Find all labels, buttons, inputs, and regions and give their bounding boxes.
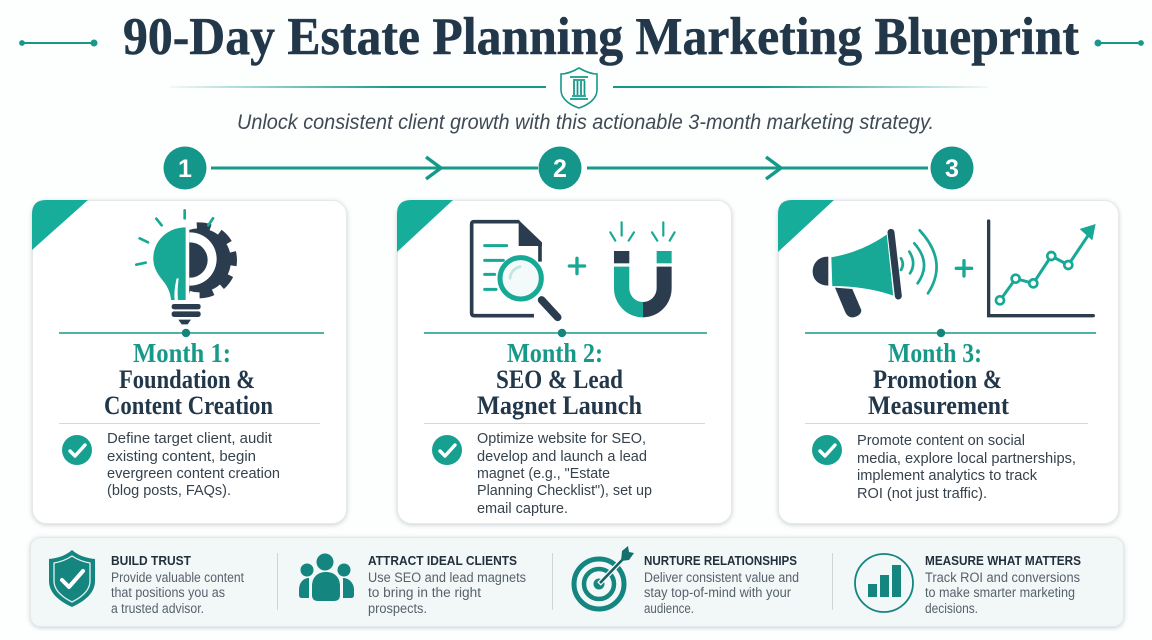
icon: check [812, 435, 842, 465]
text: build trust: that positions you as [111, 585, 225, 600]
text: measure what matters: Track ROI and conversions [925, 570, 1080, 585]
step 2 marker: 2 [553, 155, 567, 183]
benefit: nurture relationships [574, 546, 799, 616]
month 3 description: ROI (not just traffic). [857, 486, 987, 502]
text: attract ideal clients: ATTRACT IDEAL CLIENTS [368, 553, 517, 568]
icon: shield check [49, 550, 95, 607]
heading: month 3: Measurement [868, 391, 1009, 420]
month 3 description: Promote content on social [857, 433, 1025, 449]
step 2 marker [538, 146, 582, 190]
benefit: measure what matters [855, 553, 1081, 616]
text: nurture relationships: Deliver consistent value and [644, 570, 799, 585]
card background [778, 200, 1118, 524]
text: measure what matters: to make smarter marketing [925, 585, 1075, 600]
icon: check [432, 435, 462, 465]
icon: shield with pillar [561, 68, 597, 108]
month 2 description: Planning Checklist"), set up [477, 483, 652, 499]
heading: month 1 [104, 338, 273, 420]
month 2 description: Optimize website for SEO, [477, 431, 646, 447]
text: attract ideal clients [368, 553, 526, 616]
text: nurture relationships: stay top-of-mind with your [644, 585, 791, 600]
decoration: left title line [20, 40, 97, 46]
heading: month 1: Foundation & [119, 365, 255, 394]
divider with dot [805, 329, 1096, 337]
title: 90-Day Estate Planning Marketing Blueprint [123, 8, 1079, 66]
decoration: right header rule [613, 86, 988, 88]
month 1 description [107, 431, 280, 499]
heading: month 3 [868, 338, 1009, 420]
text: build trust: BUILD TRUST [111, 553, 191, 568]
step 1 marker: 1 [178, 155, 192, 183]
icon: people [299, 554, 354, 601]
month 3 description: media, explore local partnerships, [857, 451, 1076, 467]
icon: bar chart in circle [855, 554, 913, 612]
month 2 description [477, 431, 652, 517]
text: attract ideal clients: to bring in the right [368, 585, 481, 600]
benefit: attract ideal clients [299, 553, 526, 616]
heading: month 2 [477, 338, 642, 420]
icon: document, magnifier, plus and magnet [472, 220, 675, 317]
heading: month 3: Promotion & [873, 365, 1002, 394]
divider with dot [59, 329, 324, 337]
strip background [30, 538, 1124, 626]
heading: month 1: Month 1: [133, 338, 231, 368]
month 2 description: develop and launch a lead [477, 449, 647, 465]
step 3 marker [930, 146, 974, 190]
text: nurture relationships: audience. [644, 601, 694, 616]
card background [398, 200, 732, 524]
month 1 description: evergreen content creation [107, 466, 280, 482]
step timeline [164, 146, 974, 190]
text: nurture relationships: NURTURE RELATIONSHIPS [644, 553, 797, 568]
text: attract ideal clients: prospects. [368, 601, 427, 616]
text: nurture relationships [644, 553, 799, 616]
month 1 description: (blog posts, FAQs). [107, 483, 231, 499]
benefit: build trust [49, 550, 244, 616]
month 3 description: implement analytics to track [857, 468, 1038, 484]
heading: month 3: Month 3: [888, 338, 982, 368]
text: build trust: Provide valuable content [111, 570, 244, 585]
icon: light bulb and gear [136, 210, 239, 324]
divider with dot [424, 329, 707, 337]
subtitle: Unlock consistent client growth with this actionable 3-month marketing strategy. [237, 111, 934, 134]
panel: month 2 [397, 200, 732, 524]
heading: month 2: Magnet Launch [477, 391, 642, 420]
panel: benefits strip [30, 538, 1124, 626]
text: measure what matters: decisions. [925, 601, 978, 616]
month 2 description: email capture. [477, 501, 568, 517]
text: build trust: a trusted advisor. [111, 601, 204, 616]
arrow: step 1 to step 2 [211, 157, 538, 179]
text: measure what matters: MEASURE WHAT MATTERS [925, 553, 1081, 568]
heading: month 2: SEO & Lead [496, 365, 623, 394]
corner accent [32, 200, 88, 250]
icon: target and dart [574, 546, 634, 609]
corner accent [778, 200, 834, 252]
month 1 description: existing content, begin [107, 449, 256, 465]
panel: month 3 [778, 200, 1118, 524]
month 2 description: magnet (e.g., "Estate [477, 466, 610, 482]
month 3 description [857, 433, 1076, 502]
heading: month 1: Content Creation [104, 391, 273, 420]
arrow: step 2 to step 3 [587, 157, 928, 179]
decoration: right title line [1095, 40, 1143, 46]
text: attract ideal clients: Use SEO and lead magnets [368, 570, 526, 585]
corner accent [397, 200, 453, 252]
panel: month 1 [32, 200, 346, 524]
text: build trust [111, 553, 244, 616]
text: measure what matters [925, 553, 1081, 616]
step 1 marker [164, 146, 206, 190]
heading: month 2: Month 2: [507, 338, 603, 368]
icon: check [62, 435, 92, 465]
decoration: left header rule [170, 86, 546, 88]
step 3 marker: 3 [945, 155, 959, 183]
card background [32, 200, 346, 524]
month 1 description: Define target client, audit [107, 431, 272, 447]
icon: megaphone, plus and growth chart [813, 221, 1096, 317]
